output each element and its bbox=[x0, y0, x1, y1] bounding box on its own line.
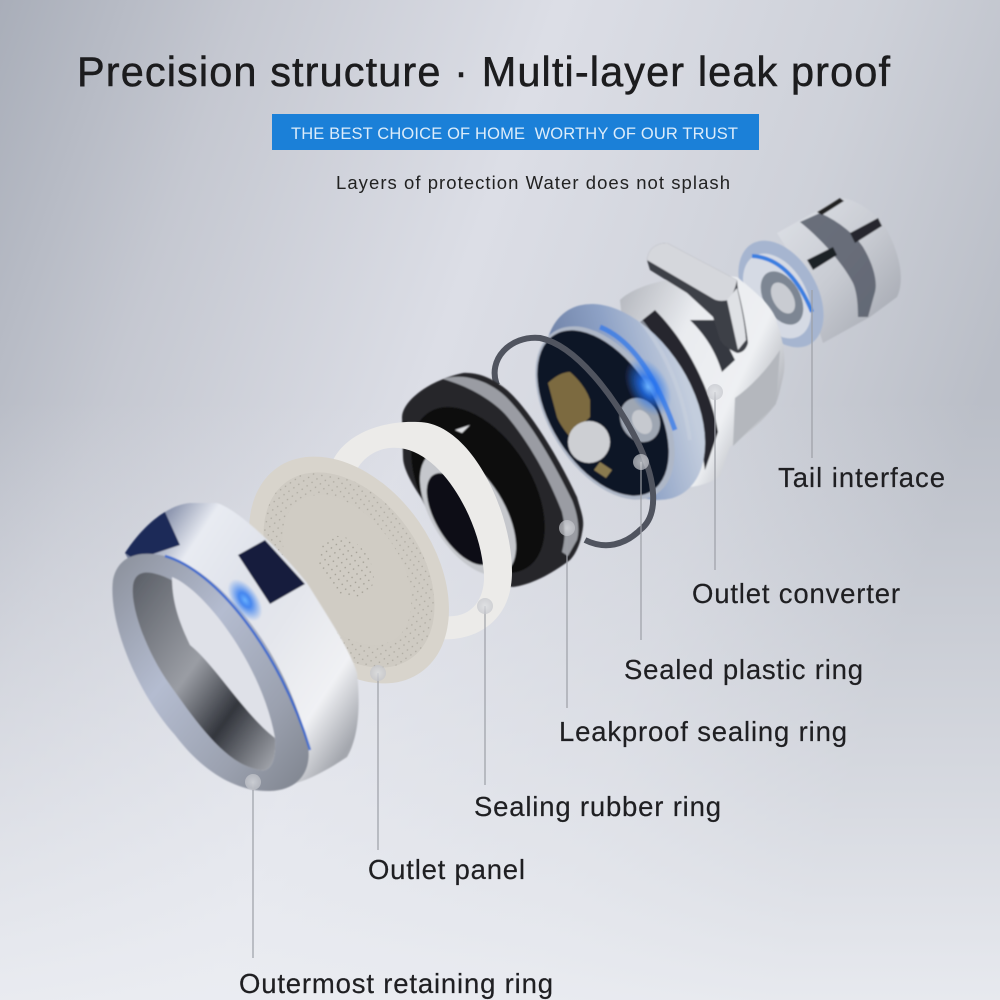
banner: THE BEST CHOICE OF HOME WORTHY OF OUR TRUST bbox=[291, 125, 738, 143]
part: sealed plastic ring bbox=[495, 338, 653, 545]
label: outermost retaining ring: Outermost retaining ring bbox=[239, 968, 553, 999]
banner bbox=[272, 114, 759, 150]
leader lines bbox=[253, 290, 812, 958]
part: outlet panel bbox=[208, 419, 490, 721]
label: leakproof sealing ring: Leakproof sealing ring bbox=[559, 716, 847, 747]
part: sealing rubber ring bbox=[328, 422, 512, 639]
title: Precision structure · Multi-layer leak proof bbox=[77, 48, 890, 95]
part: outermost retaining ring bbox=[112, 503, 359, 791]
label: outlet converter: Outlet converter bbox=[692, 578, 900, 609]
part: tail interface bbox=[721, 198, 901, 362]
subtitle: Layers of protection Water does not splash bbox=[336, 172, 730, 193]
label: outlet panel: Outlet panel bbox=[368, 854, 525, 885]
part: leakproof sealing ring bbox=[383, 373, 583, 597]
label: tail interface: Tail interface bbox=[778, 462, 945, 493]
part: outlet converter bbox=[507, 243, 785, 529]
label: sealed plastic ring: Sealed plastic ring bbox=[624, 654, 863, 685]
label: sealing rubber ring: Sealing rubber ring bbox=[474, 791, 721, 822]
anchor dots bbox=[245, 384, 723, 790]
